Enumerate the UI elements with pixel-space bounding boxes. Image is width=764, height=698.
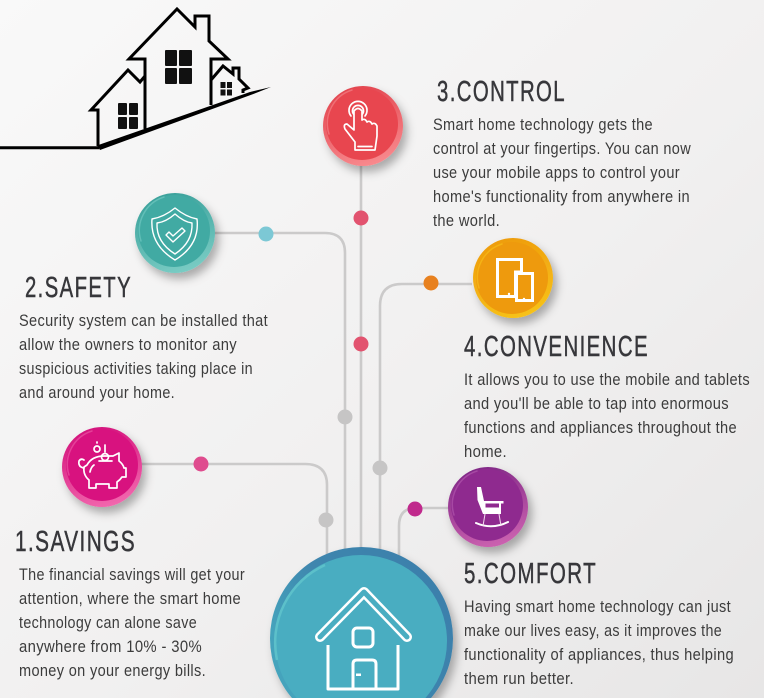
- icon badge: control (hand): [323, 86, 403, 166]
- text block: 4.convenience: home.: [464, 442, 507, 461]
- icon badge: comfort (rocking chair): [448, 467, 528, 547]
- text block: 1.savings: The financial savings will get your: [19, 565, 245, 584]
- text block: 5.comfort: make our lives easy, as it improves the: [464, 621, 722, 640]
- text block: 3.control: the world.: [433, 211, 500, 230]
- text block: 2.safety: [19, 272, 268, 402]
- icon badge: savings (piggy bank): [62, 427, 142, 507]
- text block: 1.savings: [15, 526, 245, 680]
- icon badge: convenience (devices): [473, 238, 553, 318]
- text block: 2.safety: Security system can be installed that: [19, 311, 268, 330]
- text block: 4.convenience: and you'll be able to tap into enormous: [464, 394, 729, 413]
- central home badge: [270, 547, 453, 698]
- text block: 1.savings: attention, where the smart home: [19, 589, 241, 608]
- text block: 3.control: home's functionality from anywhere in: [433, 187, 690, 206]
- text block: 5.comfort: [464, 558, 734, 688]
- text block: 4.convenience: 4.CONVENIENCE: [464, 331, 649, 363]
- icon: houses on a slope: [0, 9, 271, 150]
- icon: shield: [152, 208, 197, 260]
- connector dots: [194, 210, 438, 528]
- text block: 5.comfort: 5.COMFORT: [464, 558, 597, 590]
- text block: 1.savings: anywhere from 10% - 30%: [19, 637, 202, 656]
- icon: pointing hand: [344, 101, 377, 150]
- text block: 2.safety: and around your home.: [19, 383, 175, 402]
- text block: 3.control: use your mobile apps to control your: [433, 163, 680, 182]
- icon: house: [320, 592, 407, 689]
- text block: 2.safety: allow the owners to monitor any: [19, 335, 237, 354]
- icon badge: safety (shield): [135, 193, 215, 273]
- text block: 3.control: [433, 76, 691, 230]
- text block: 2.safety: suspicious activities taking place in: [19, 359, 253, 378]
- text block: 1.savings: technology can alone save: [19, 613, 197, 632]
- text block: 3.control: Smart home technology gets the: [433, 115, 653, 134]
- text block: 3.control: 3.CONTROL: [437, 76, 566, 108]
- text block: 2.safety: 2.SAFETY: [25, 272, 132, 304]
- text block: 5.comfort: them run better.: [464, 669, 574, 688]
- connector lines: [140, 135, 472, 560]
- icon: piggy: [79, 442, 126, 488]
- icon: tablet and phone: [498, 260, 532, 300]
- text block: 1.savings: 1.SAVINGS: [15, 526, 136, 558]
- text block: 1.savings: money on your energy bills.: [19, 661, 206, 680]
- text block: 3.control: control at your fingertips. You can now: [433, 139, 691, 158]
- text block: 4.convenience: [464, 331, 750, 461]
- icon: rocking chair: [476, 487, 508, 526]
